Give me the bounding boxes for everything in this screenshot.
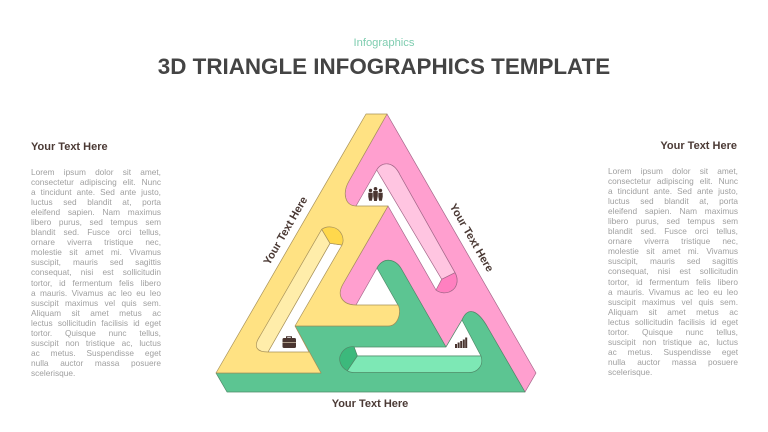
left text block: scelerisque. <box>31 368 75 378</box>
right text block: suscipit non tristique ac, luctus <box>608 337 738 347</box>
green arm <box>216 260 525 392</box>
pink channel strip <box>377 164 455 279</box>
yellow channel strip <box>256 229 330 352</box>
right text block: luctus sed blandit at, porta <box>608 196 738 206</box>
left text block: eleifend sapien. Nam maximus <box>31 207 161 217</box>
left text block <box>31 166 161 378</box>
right text block: a tincidunt ante. Sed ante justo, <box>608 186 738 196</box>
left text block: ac metus. Suspendisse eget <box>31 348 161 358</box>
right text block: ornare viverra tristique nec, <box>608 236 738 246</box>
left text block: consectetur adipiscing elit. Nunc <box>31 177 161 187</box>
pink channel cap <box>436 273 457 293</box>
yellow arm <box>216 114 400 373</box>
right text block: ac metus. Suspendisse eget <box>608 347 738 357</box>
icon: bar chart <box>455 338 467 348</box>
right text block: consectetur adipiscing elit. Nunc <box>608 176 738 186</box>
left heading: Your Text Here <box>31 141 108 153</box>
right heading: Your Text Here <box>660 140 737 152</box>
yellow channel cap <box>322 227 343 245</box>
right text block: a mauris. Vivamus ac leo eu leo <box>608 287 738 297</box>
right text block: tortor, id fermentum felis libero <box>608 277 738 287</box>
left text block: Aliquam sit amet metus ac <box>31 308 161 318</box>
right text block: blandit sed. Fusce orci tellus, <box>608 226 738 236</box>
label: left side: Your Text Here <box>262 195 310 267</box>
left text block: tortor. Quisque nunc tellus, <box>31 328 161 338</box>
right text block: libero purus, sed tempus sem <box>608 216 738 226</box>
right text block: molestie sit amet mi. Vivamus <box>608 246 738 256</box>
left text block: lectus sollicitudin facilisis id eget <box>31 318 161 328</box>
right text block: consequat, nisi est sollicitudin <box>608 266 738 276</box>
pink arm <box>340 114 536 392</box>
right text block: eleifend sapien. Nam maximus <box>608 206 738 216</box>
left text block: suscipit, mauris sed sagittis <box>31 257 161 267</box>
left text block: molestie sit amet mi. Vivamus <box>31 247 161 257</box>
icon: briefcase <box>282 336 296 348</box>
left text block: suscipit non tristique ac, luctus <box>31 338 161 348</box>
right text block: nulla auctor massa posuere <box>608 357 738 367</box>
left text block: blandit sed. Fusce orci tellus, <box>31 227 161 237</box>
yellow channel opening <box>268 243 342 352</box>
left text block: tortor, id fermentum felis libero <box>31 278 161 288</box>
right text block: suscipit maximus vel quis sem. <box>608 297 738 307</box>
left text block: consequat, nisi est sollicitudin <box>31 267 161 277</box>
left text block: suscipit maximus vel quis sem. <box>31 298 161 308</box>
left text block: luctus sed blandit at, porta <box>31 197 161 207</box>
right text block: Lorem ipsum dolor sit amet, <box>608 166 738 176</box>
subtitle: Infographics <box>354 37 414 49</box>
label: bottom: Your Text Here <box>332 398 408 410</box>
left text block: nulla auctor massa posuere <box>31 358 161 368</box>
right text block: suscipit, mauris sed sagittis <box>608 256 738 266</box>
green channel cap <box>340 347 357 371</box>
title: 3D TRIANGLE INFOGRAPHICS TEMPLATE <box>158 54 610 79</box>
green channel opening <box>354 320 481 356</box>
right text block: tortor. Quisque nunc tellus, <box>608 327 738 337</box>
label: right side: Your Text Here <box>447 202 495 274</box>
icon: people <box>368 187 383 201</box>
right text block <box>608 166 738 377</box>
left text block: libero purus, sed tempus sem <box>31 217 161 227</box>
right text block: Aliquam sit amet metus ac <box>608 307 738 317</box>
right text block: scelerisque. <box>608 367 652 377</box>
left text block: a tincidunt ante. Sed ante justo, <box>31 187 161 197</box>
right text block: lectus sollicitudin facilisis id eget <box>608 317 738 327</box>
left text block: ornare viverra tristique nec, <box>31 237 161 247</box>
left text block: Lorem ipsum dolor sit amet, <box>31 166 161 176</box>
green channel strip <box>347 356 482 372</box>
left text block: a mauris. Vivamus ac leo eu leo <box>31 288 161 298</box>
